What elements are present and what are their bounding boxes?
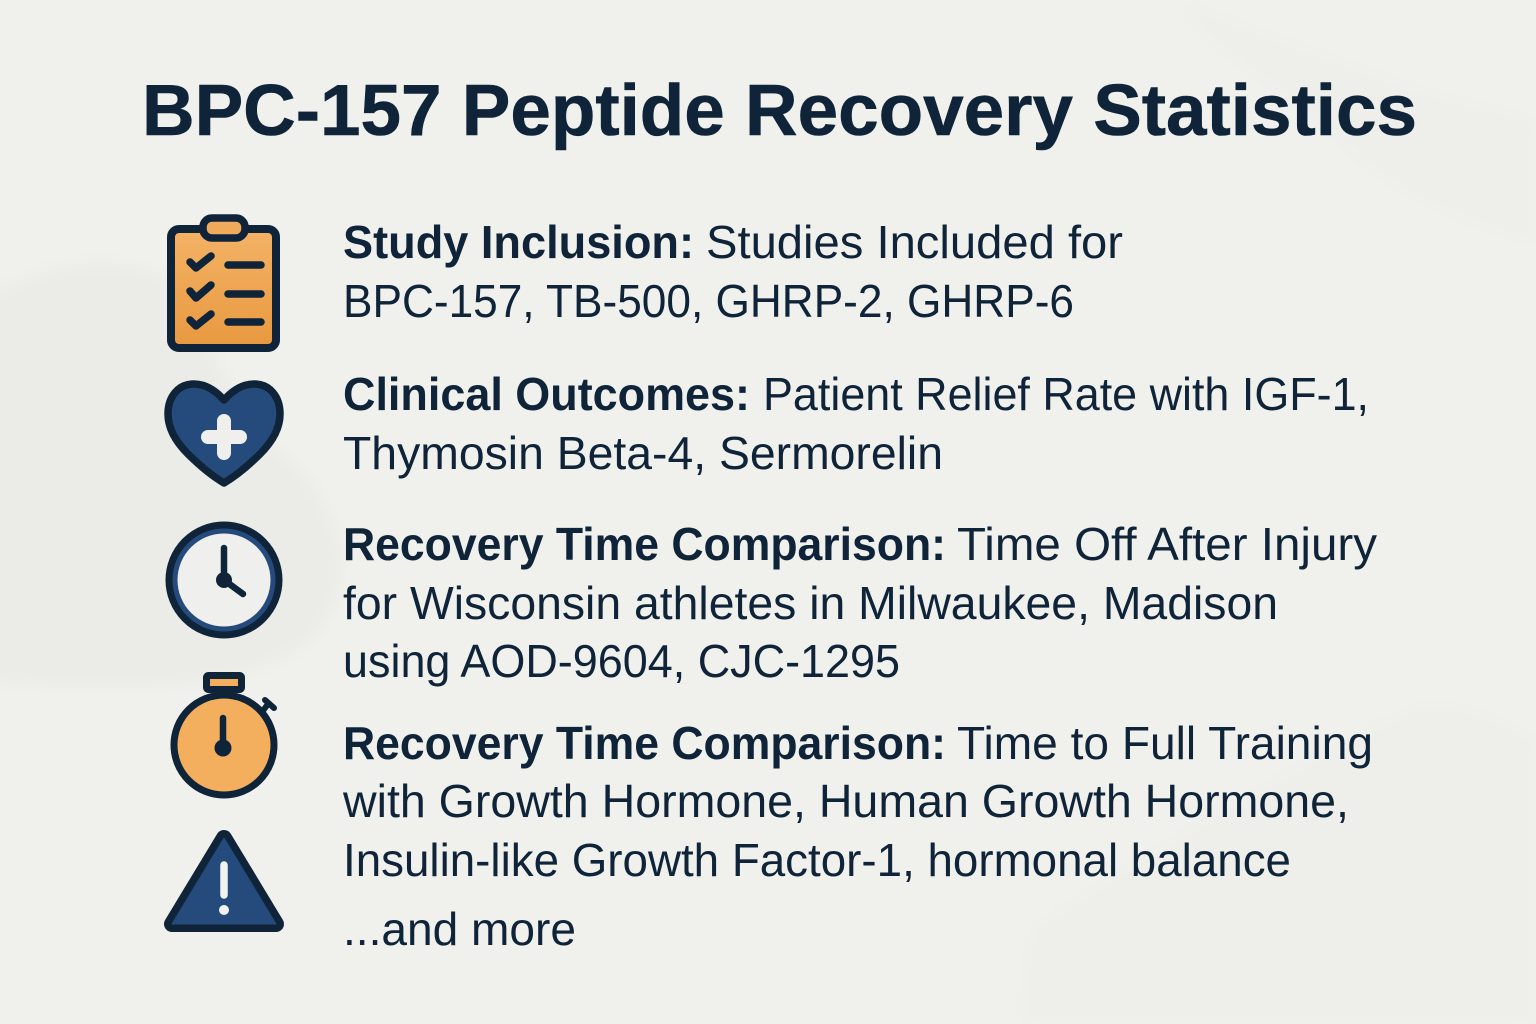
text: clinical outcomes: [343, 368, 1369, 479]
icon: stopwatch: [174, 676, 274, 795]
text: study inclusion: Studies Included for: [706, 216, 1123, 268]
text: recovery time to training: Insulin-like Growth Factor-1, hormonal balance: [343, 834, 1291, 886]
text: recovery time to training: [342, 717, 1373, 886]
text: recovery time off: Recovery Time Comparison:: [343, 518, 946, 570]
title: BPC-157 Peptide Recovery Statistics: [142, 71, 1417, 151]
icon: clipboard checklist: [171, 218, 276, 348]
text: and more: ...and more: [343, 903, 576, 955]
text: recovery time off: for Wisconsin athletes in Milwaukee, Madison: [343, 577, 1278, 629]
text: recovery time off: using AOD-9604, CJC-1295: [343, 635, 900, 687]
text: recovery time to training: with Growth Hormone, Human Growth Hormone,: [342, 775, 1349, 827]
icon: clock: [169, 525, 279, 635]
text: study inclusion: [343, 216, 1123, 327]
icon: warning triangle: [172, 838, 276, 924]
icon: heart with cross: [168, 384, 280, 483]
text: clinical outcomes: Clinical Outcomes:: [343, 368, 750, 420]
text: study inclusion: Study Inclusion:: [343, 216, 694, 268]
text: recovery time off: Time Off After Injury: [957, 518, 1377, 570]
text: recovery time to training: Recovery Time Comparison:: [343, 717, 946, 769]
text: recovery time off: [343, 518, 1377, 687]
text: clinical outcomes: Patient Relief Rate with IGF-1,: [763, 368, 1369, 420]
text: clinical outcomes: Thymosin Beta-4, Sermorelin: [343, 427, 943, 479]
text: recovery time to training: Time to Full Training: [957, 717, 1373, 769]
text: study inclusion: BPC-157, TB-500, GHRP-2, GHRP-6: [343, 275, 1074, 327]
